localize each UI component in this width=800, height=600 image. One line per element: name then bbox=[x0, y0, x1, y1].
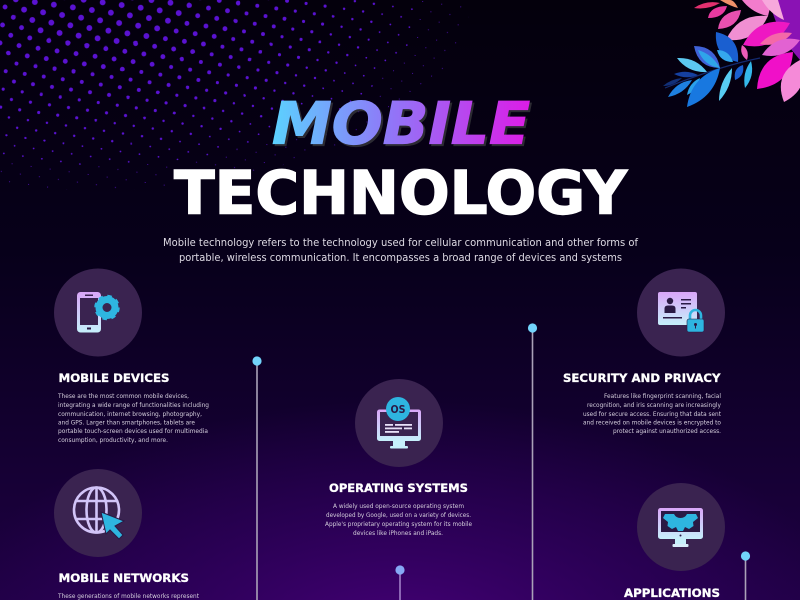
panel: mobile networks bbox=[54, 469, 200, 600]
panel: mobile devices bbox=[54, 268, 209, 444]
icon: phone with gear bbox=[54, 268, 142, 356]
description: integrating a wide range of functionalities including bbox=[58, 402, 209, 409]
panel: security and privacy bbox=[563, 268, 725, 435]
heading: MOBILE NETWORKS bbox=[58, 571, 189, 585]
description: protect against unauthorized access. bbox=[613, 428, 721, 435]
halftone dot pattern bbox=[0, 0, 480, 200]
floral decoration bbox=[663, 0, 800, 107]
description bbox=[325, 503, 472, 537]
title: MOBILE: MOBILE bbox=[274, 92, 532, 160]
description: A widely used open-source operating system bbox=[333, 503, 464, 510]
icon: globe with cursor bbox=[54, 469, 142, 557]
panel: applications bbox=[624, 483, 725, 600]
intro text: Mobile technology refers to the technology used for cellular communication and other forms of bbox=[163, 236, 639, 249]
timeline line 2 bbox=[528, 323, 537, 600]
timeline line 4 bbox=[741, 551, 750, 600]
description: Features like fingerprint scanning, facial bbox=[604, 393, 721, 400]
heading: MOBILE DEVICES bbox=[58, 371, 170, 385]
title: TECHNOLOGY: TECHNOLOGY bbox=[174, 158, 629, 228]
description: and GPS. Larger than smartphones, tablets are bbox=[58, 420, 195, 426]
description: recognition, and iris scanning are increasingly bbox=[587, 402, 721, 409]
description bbox=[583, 393, 722, 435]
description: developed by Google, used on a variety of devices. bbox=[326, 512, 471, 519]
description: communication, internet browsing, photography, bbox=[58, 411, 202, 418]
icon: ID card with padlock bbox=[637, 268, 725, 356]
timeline line 3 bbox=[395, 565, 405, 600]
intro text bbox=[163, 236, 639, 264]
icon: monitor with OS badge bbox=[355, 379, 443, 467]
description bbox=[57, 393, 209, 444]
icon: monitor with gear bbox=[637, 483, 725, 571]
description: Apple's proprietary operating system for its mobile bbox=[325, 521, 472, 528]
description: and received on mobile devices is encrypted to bbox=[583, 420, 721, 426]
description: These are the most common mobile devices, bbox=[57, 393, 189, 400]
icon: monitor with OS badge: OS bbox=[390, 404, 406, 416]
panel: operating systems bbox=[325, 379, 472, 537]
description: consumption, productivity, and more. bbox=[58, 437, 168, 444]
heading: APPLICATIONS bbox=[624, 586, 720, 600]
intro text: portable, wireless communication. It encompasses a broad range of devices and systems bbox=[179, 251, 622, 264]
description: devices like iPhones and iPads. bbox=[353, 530, 443, 537]
heading: OPERATING SYSTEMS bbox=[329, 481, 468, 495]
description: portable touch-screen devices used for multimedia bbox=[58, 428, 208, 435]
heading: SECURITY AND PRIVACY bbox=[563, 371, 721, 385]
title: MOBILE: MOBILE bbox=[272, 90, 530, 158]
timeline line 1 bbox=[252, 356, 262, 600]
description: used for secure access. Ensuring that data sent bbox=[583, 411, 722, 418]
description: These generations of mobile networks represent bbox=[57, 593, 200, 600]
